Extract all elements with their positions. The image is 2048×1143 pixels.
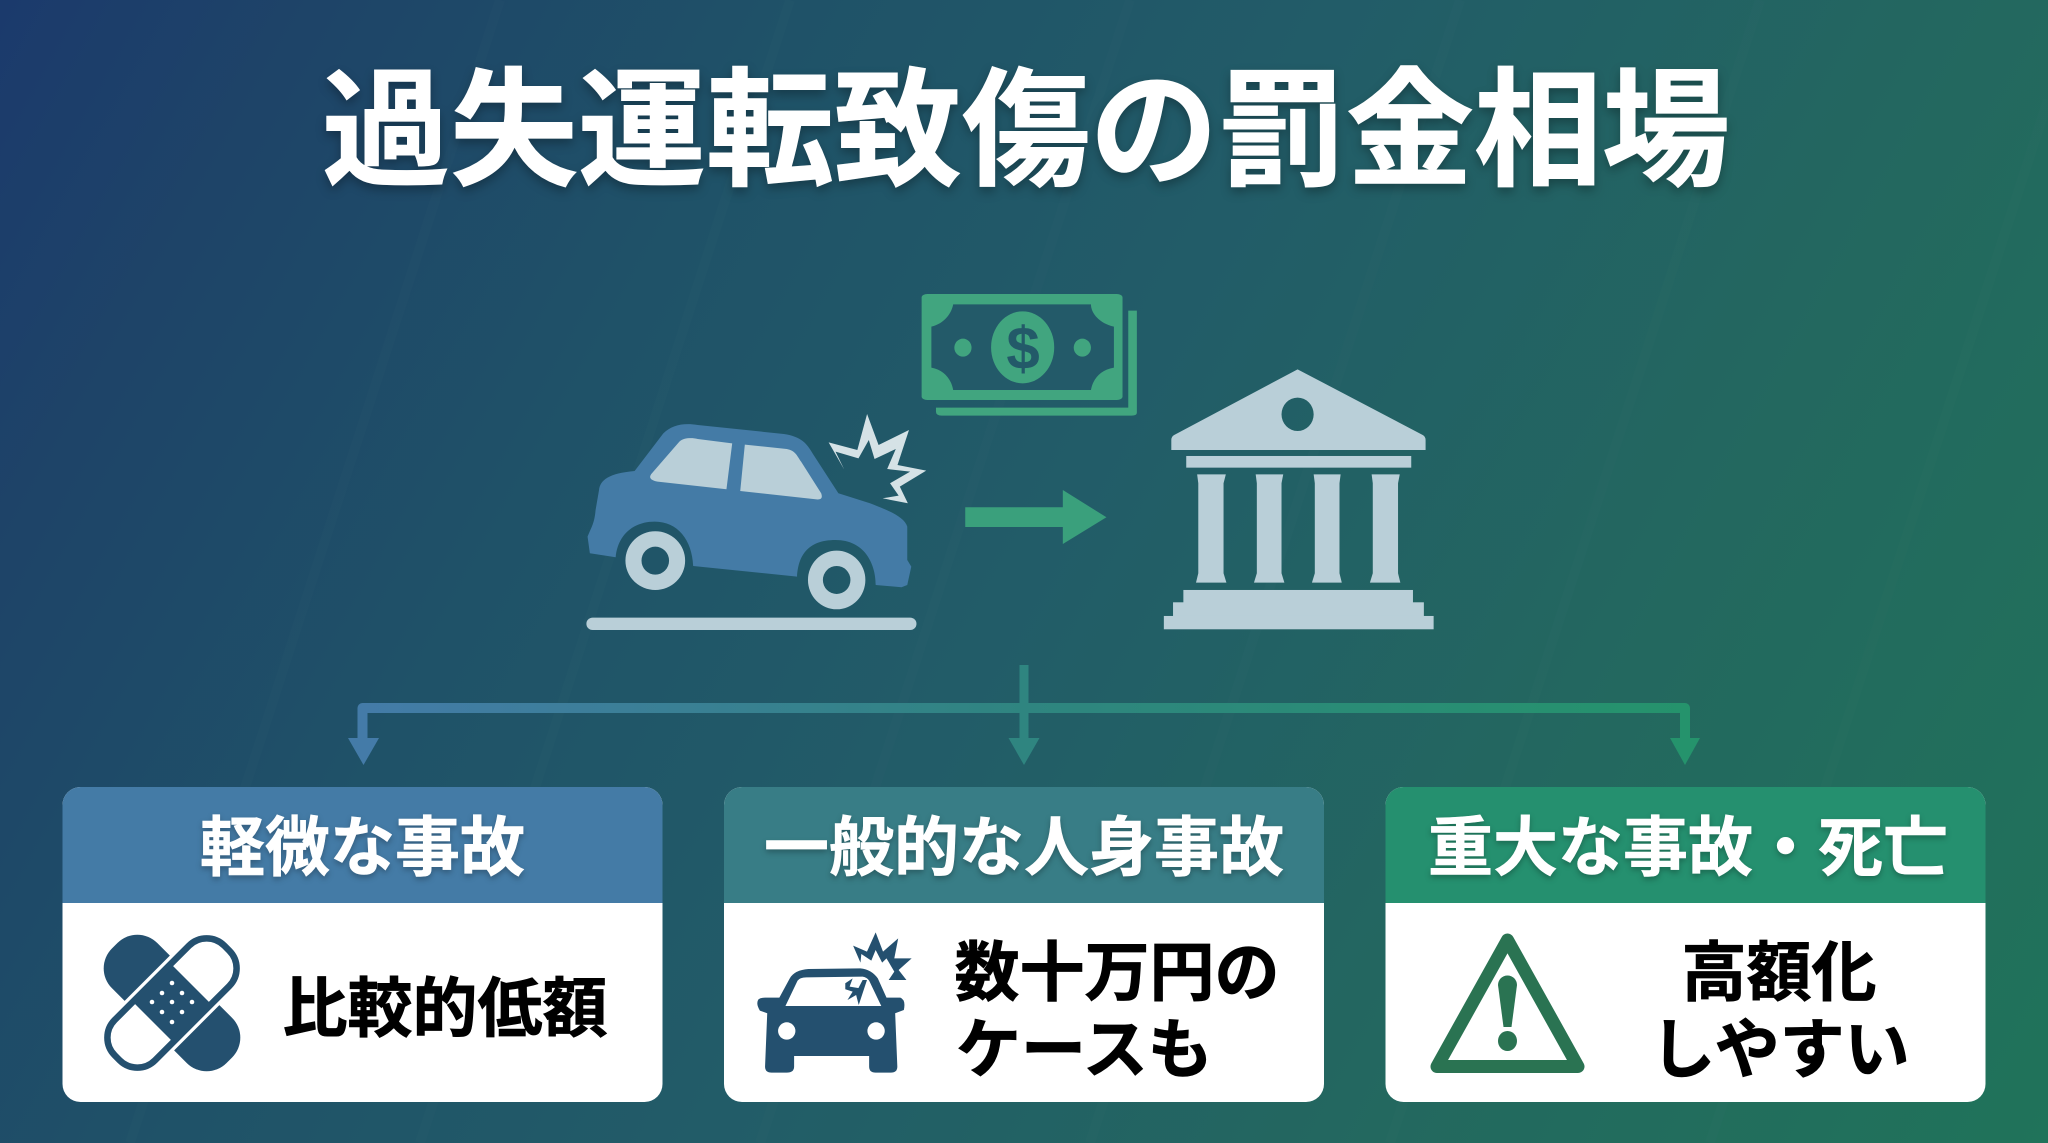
icon: courthouse	[1164, 369, 1434, 629]
heading: 一般的な人身事故	[764, 811, 1284, 884]
panel: typical injury accident: ケースも	[956, 1013, 1213, 1086]
connector arrows	[348, 665, 1700, 765]
icon: warning triangle	[1437, 940, 1578, 1066]
panel: serious or fatal accident: しやすい	[1650, 1013, 1910, 1086]
result text: 比較的低額	[282, 972, 608, 1045]
heading: 重大な事故・死亡	[1428, 811, 1948, 884]
icon: damaged car front	[757, 932, 912, 1073]
panel: typical injury accident	[724, 787, 1324, 1102]
car windows	[650, 438, 822, 499]
arrow: car to court	[965, 490, 1106, 544]
car wheels	[625, 531, 865, 609]
icon: money banknote: $	[1006, 315, 1040, 382]
card body	[1386, 787, 1986, 1102]
card body	[724, 787, 1324, 1102]
card header	[62, 787, 662, 903]
card header	[1386, 787, 1986, 903]
impact burst	[829, 414, 926, 503]
card body	[62, 787, 662, 1102]
road line	[586, 618, 916, 630]
icon: bandage	[92, 923, 252, 1083]
title: 過失運転致傷の罰金相場	[322, 60, 1730, 203]
car body	[588, 424, 911, 587]
result text: 高額化	[1681, 936, 1877, 1009]
card header	[724, 787, 1324, 903]
icon: crashed car	[586, 414, 926, 630]
panel: serious or fatal accident	[1386, 787, 1986, 1102]
panel: minor accident	[62, 787, 662, 1102]
icon: money banknote	[922, 294, 1137, 416]
result text: 数十万円の	[954, 936, 1280, 1009]
heading: 軽微な事故	[200, 811, 525, 884]
